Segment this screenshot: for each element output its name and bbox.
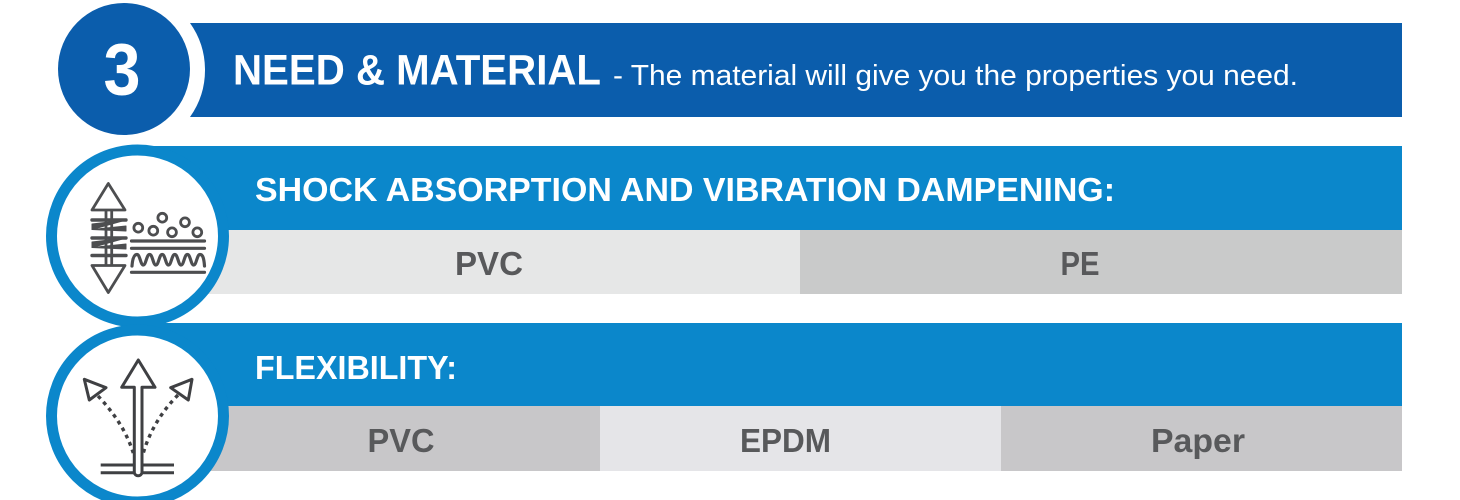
panel: flexibility [52,323,1402,500]
number badge [58,3,190,135]
header subtitle: - The material will give you the properties you need. [613,60,1298,92]
heading: flexibility: FLEXIBILITY: [255,349,457,386]
panel: shock absorption [52,146,1402,322]
blue heading bar [137,146,1402,230]
icon: shock absorption [52,150,224,322]
blue heading bar [137,323,1402,406]
material cell: EPDM [600,406,1001,471]
material cell: PVC [200,230,800,294]
icon: flexibility [52,330,224,500]
material cell: PVC [200,406,600,471]
material cell: PE [800,230,1402,294]
header banner [190,23,1402,117]
heading: shock absorption: SHOCK ABSORPTION AND VIBRATION DAMPENING: [255,171,1115,208]
material cell: EPDM: EPDM [740,422,831,459]
number badge: 3 [104,30,140,110]
header title: NEED & MATERIAL [233,48,601,94]
material cell: PVC: PVC [455,245,523,282]
material cell: PVC: PVC [368,422,434,459]
material cell: Paper [1001,406,1402,471]
material cell: PE: PE [1060,245,1100,282]
material cell: Paper: Paper [1151,422,1245,459]
header section [58,3,1402,135]
